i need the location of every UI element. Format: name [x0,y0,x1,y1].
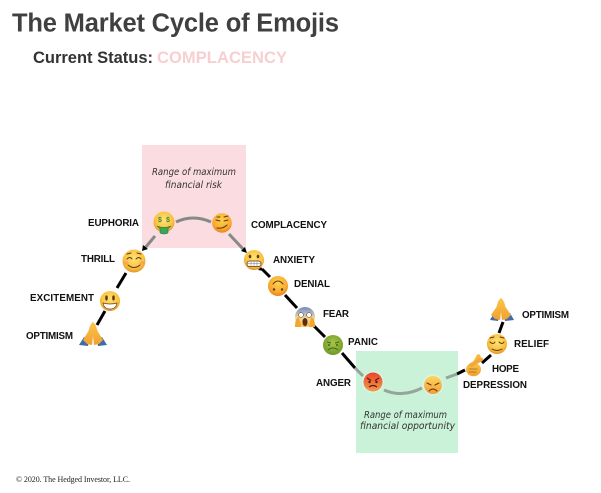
label: excitement: EXCITEMENT [30,293,94,304]
icon: hope crossed fingers [466,356,481,376]
icon: fear screaming emoji [295,307,315,327]
label: anger: ANGER [316,378,351,389]
panel text: financial opportunity: Range of maximum [364,410,447,421]
icon: anxiety grimacing emoji [244,250,264,270]
icon: denial upside-down emoji [268,276,288,296]
label: anxiety: ANXIETY [273,255,315,266]
current status line [33,49,287,67]
label: thrill: THRILL [81,254,115,265]
icon: panic nauseated emoji [323,335,343,355]
panel: range of maximum financial opportunity [356,351,458,453]
title: The Market Cycle of Emojis [12,10,339,38]
icon: euphoria money-mouth emoji: $ [158,217,162,224]
current status line: Current Status: [33,49,153,67]
label: optimism right: OPTIMISM [522,310,569,321]
icon: euphoria money-mouth emoji [154,212,174,234]
cycle connector lines [97,218,503,394]
panel text: financial risk: financial risk [165,180,223,191]
label: optimism left: OPTIMISM [26,331,73,342]
panel: range of maximum financial risk [142,145,246,248]
status value: COMPLACENCY [157,49,287,67]
icon: euphoria money-mouth emoji: $ [166,217,170,224]
panel text: financial opportunity: financial opportunity [360,421,455,432]
icon: excitement emoji [100,291,120,311]
copyright footer: © 2020. The Hedged Investor, LLC. [16,475,130,484]
icon: praying hands right [490,298,514,321]
panel text: financial risk [152,167,236,191]
label: hope: HOPE [492,364,519,375]
label: depression: DEPRESSION [463,380,527,391]
label: denial: DENIAL [294,279,330,290]
label: fear: FEAR [323,309,349,320]
label: panic: PANIC [348,337,378,348]
label: euphoria: EUPHORIA [88,218,139,229]
icon: praying hands left [79,322,107,346]
icon: thrill emoji [122,250,146,272]
label: complacency: COMPLACENCY [251,220,327,231]
icon: depression disappointed emoji [422,374,444,396]
panel text: financial risk: Range of maximum [152,167,236,178]
panel text: financial opportunity [360,410,455,432]
label: relief: RELIEF [514,339,549,350]
icon: anger pouting emoji [362,371,384,393]
icon: relief emoji [487,334,507,354]
icon: complacency smirking emoji [212,213,232,233]
